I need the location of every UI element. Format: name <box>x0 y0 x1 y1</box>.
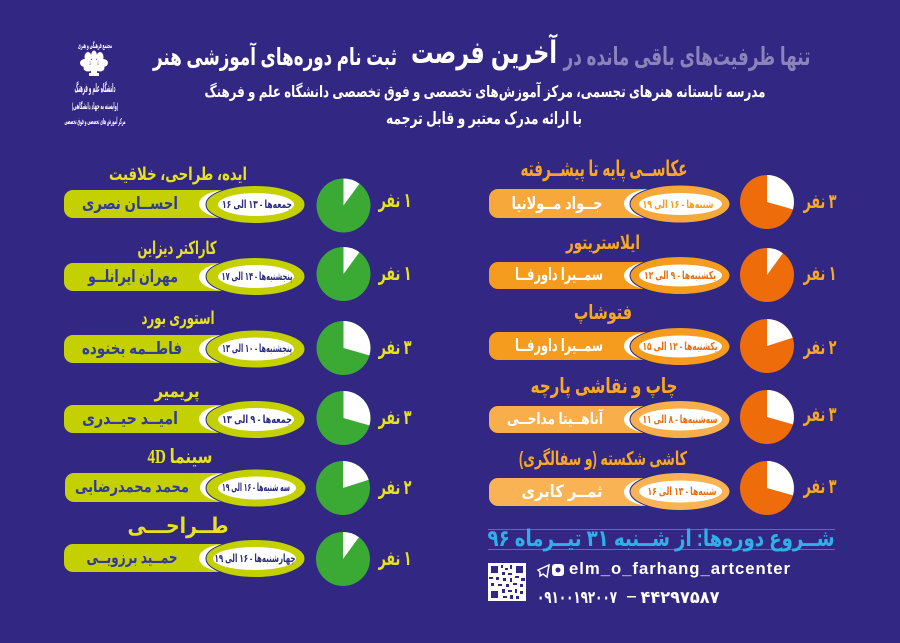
teacher name: سمــیرا داورفــا <box>515 336 603 356</box>
course: design <box>64 513 412 586</box>
name bar <box>489 256 730 294</box>
pie chart <box>316 321 370 375</box>
course: photoshop <box>489 302 836 373</box>
schedule: یکشنبه‌ها - ۹ الی ۱۲ <box>644 270 716 282</box>
text: (وابسته به جهاد دانشگاهی) <box>72 100 118 112</box>
name bar <box>489 400 730 438</box>
name bar <box>64 186 305 224</box>
logo <box>64 40 126 127</box>
seats label: ۱ نفر <box>803 263 836 285</box>
pie chart <box>316 247 370 301</box>
phone numbers: ۴۴۲۹۷۵۸۷ <box>640 588 720 607</box>
seats label: ۳ نفر <box>378 407 412 429</box>
seats label: ۲ نفر <box>378 477 412 499</box>
instagram handle: elm_o_farhang_artcenter <box>569 559 791 578</box>
schedule: پنجشنبه‌ها - ۱۴ الی ۱۷ <box>221 271 292 283</box>
seats label: ۱ نفر <box>378 190 412 212</box>
schedule: چهارشنبه‌ها - ۱۶ الی ۱۹ <box>214 553 296 565</box>
teacher name: ثمــر کابری <box>522 482 602 502</box>
pie chart <box>316 461 370 515</box>
schedule: شنبه‌ها - ۱۳ الی ۱۶ <box>648 486 716 498</box>
text: مرکز آموزش های تخصصی و فوق تخصصی <box>64 116 126 127</box>
name bar <box>64 258 305 296</box>
pie chart <box>316 178 370 232</box>
course title: سینما 4D <box>148 446 212 468</box>
text: دانشگاه علم و فرهنگ <box>74 81 116 96</box>
logo flower emblem <box>80 50 108 76</box>
pie chart <box>740 461 794 515</box>
name bar <box>64 540 305 578</box>
schedule: شنبه‌ها - ۱۶ الی ۱۹ <box>642 199 714 211</box>
teacher name: سمــیرا داورفــا <box>515 265 603 285</box>
course title: عکاســی پایه تا پیشــرفته <box>520 156 688 182</box>
course title: ایده، طراحی، خلاقیت <box>109 164 247 185</box>
course title: چاپ و نقاشی پارچه <box>530 375 678 398</box>
pie chart <box>740 390 794 444</box>
schedule: یکشنبه‌ها - ۱۲ الی ۱۵ <box>642 341 718 353</box>
logo: مجتمع فرهنگی و هنری <box>78 40 112 50</box>
schedule: سه‌شنبه‌ها - ۸ الی ۱۱ <box>642 414 718 426</box>
course: storyboard <box>64 308 412 375</box>
pie chart <box>316 532 370 586</box>
course title: طــراحـــی <box>128 513 228 539</box>
teacher name: امیــد حیــدری <box>82 409 178 428</box>
seats label: ۳ نفر <box>803 404 836 426</box>
name bar <box>65 469 306 507</box>
name bar <box>489 185 730 223</box>
pie chart <box>740 319 794 373</box>
icon: telegram <box>538 565 549 577</box>
seats label: ۳ نفر <box>378 337 412 359</box>
course: idea design <box>64 164 412 232</box>
schedule: جمعه‌ها - ۱۳ الی ۱۶ <box>222 199 292 211</box>
name bar <box>489 472 730 510</box>
title line part 3: ثبت نام دوره‌های آموزشی هنر <box>152 42 397 71</box>
name bar <box>64 330 305 368</box>
teacher name: حمــید برزویــی <box>86 548 178 568</box>
course title: کاشی شکسته (و سفالگری) <box>519 447 688 470</box>
seats label: ۱ نفر <box>378 548 412 570</box>
schedule: پنجشنبه‌ها - ۱۰ الی ۱۳ <box>222 343 292 355</box>
course title: ایلاستریتور <box>565 233 640 254</box>
course title: پریمیر <box>154 381 200 402</box>
teacher name: آناهــیتا مداحــی <box>507 408 603 428</box>
pie chart <box>740 175 794 229</box>
course: cinema 4D <box>65 446 412 515</box>
phone numbers: ۰۹۱۰۰۱۹۲۰۰۷ <box>537 588 617 607</box>
teacher name: مهران ایرانلــو <box>87 267 178 287</box>
course title: استوری بورد <box>142 308 214 329</box>
teacher name: احســان نصری <box>82 194 178 214</box>
teacher name: محمد محمدرضایی <box>75 479 189 496</box>
name bar <box>64 400 305 438</box>
seats label: ۱ نفر <box>378 263 412 285</box>
course: broken tile <box>489 447 836 515</box>
seats label: ۳ نفر <box>803 476 836 498</box>
schedule: جمعه‌ها - ۹ الی ۱۳ <box>222 414 292 426</box>
icon: instagram <box>552 564 564 576</box>
name bar <box>489 328 730 366</box>
start date banner: شــروع دوره‌ها: از شــنبه ۳۱ تیــرماه ۹۶ <box>488 525 834 552</box>
seats label: ۳ نفر <box>803 191 836 213</box>
course title: فتوشاپ <box>574 302 632 324</box>
course: fabric printing <box>489 375 836 444</box>
course: character design <box>64 238 412 301</box>
schedule: سه شنبه‌ها - ۱۶ الی ۱۹ <box>222 482 290 494</box>
course title: کاراکتر دیزاین <box>138 238 217 259</box>
QR code <box>488 563 526 601</box>
teacher name: جــواد مــولانیا <box>512 194 602 214</box>
course: illustrator <box>489 233 836 302</box>
seats label: ۲ نفر <box>803 337 836 359</box>
course: premiere <box>64 381 412 445</box>
pie chart <box>740 248 794 302</box>
phone numbers <box>537 588 720 607</box>
title line part 2: آخرین فرصت <box>411 33 558 71</box>
teacher name: فاطــمه بخنوده <box>82 339 182 359</box>
pie chart <box>316 391 370 445</box>
subtitle second line: با ارائه مدرک معتبر و قابل ترجمه <box>386 109 582 129</box>
course: photography <box>489 156 836 229</box>
